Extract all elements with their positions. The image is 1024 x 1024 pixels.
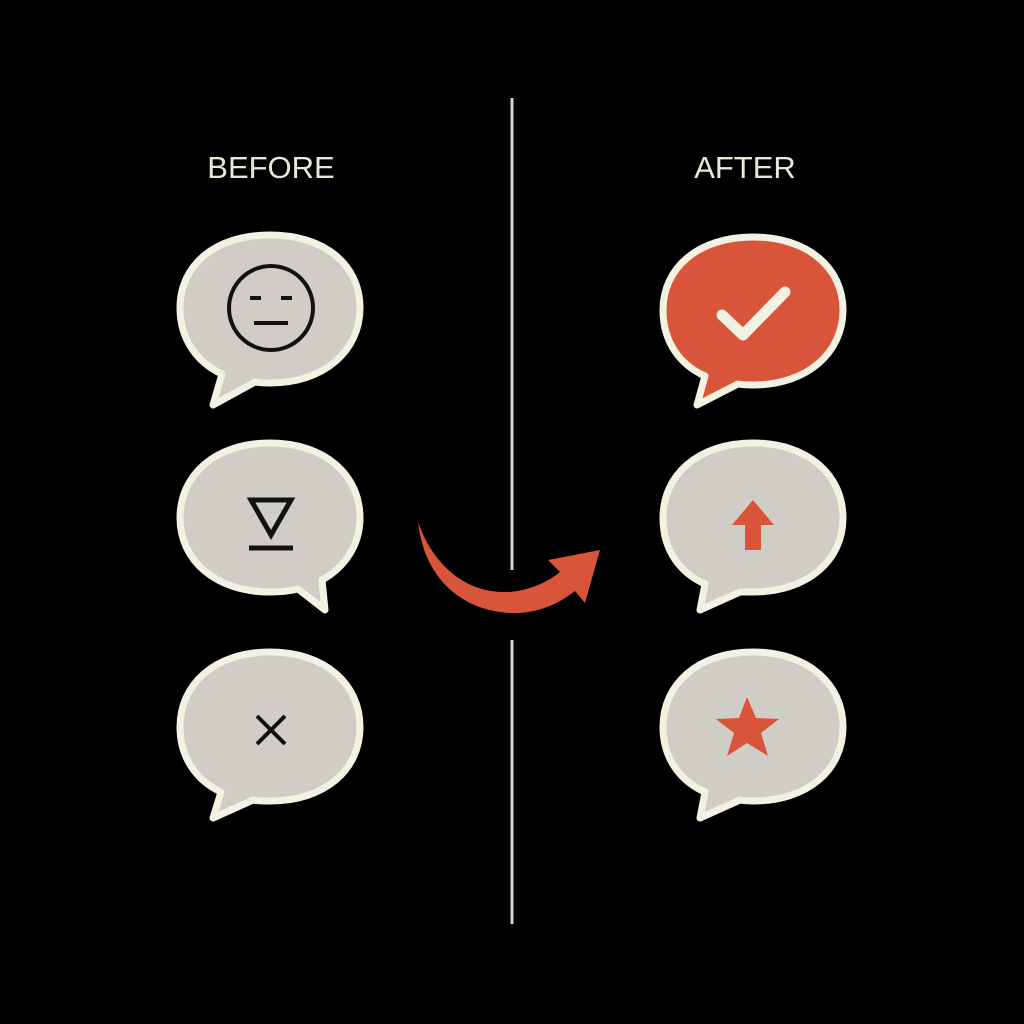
bubble: x bbox=[180, 652, 360, 818]
bubble: neutral face bbox=[180, 235, 360, 405]
bubble: star bbox=[663, 652, 843, 818]
icon: triangle with underline bbox=[249, 500, 293, 548]
bubble: down triangle bbox=[180, 443, 360, 610]
heading: after: AFTER bbox=[694, 150, 796, 185]
icon: up arrow bbox=[732, 500, 774, 550]
icon: neutral face bbox=[229, 266, 313, 350]
heading: before: BEFORE bbox=[207, 150, 335, 185]
icon: star bbox=[716, 697, 779, 756]
arrow: curved transition bbox=[418, 522, 600, 613]
bubble: check (red) bbox=[663, 237, 843, 405]
icon: checkmark bbox=[722, 292, 785, 335]
bubble: up arrow bbox=[663, 443, 843, 610]
icon: x mark bbox=[257, 716, 285, 744]
